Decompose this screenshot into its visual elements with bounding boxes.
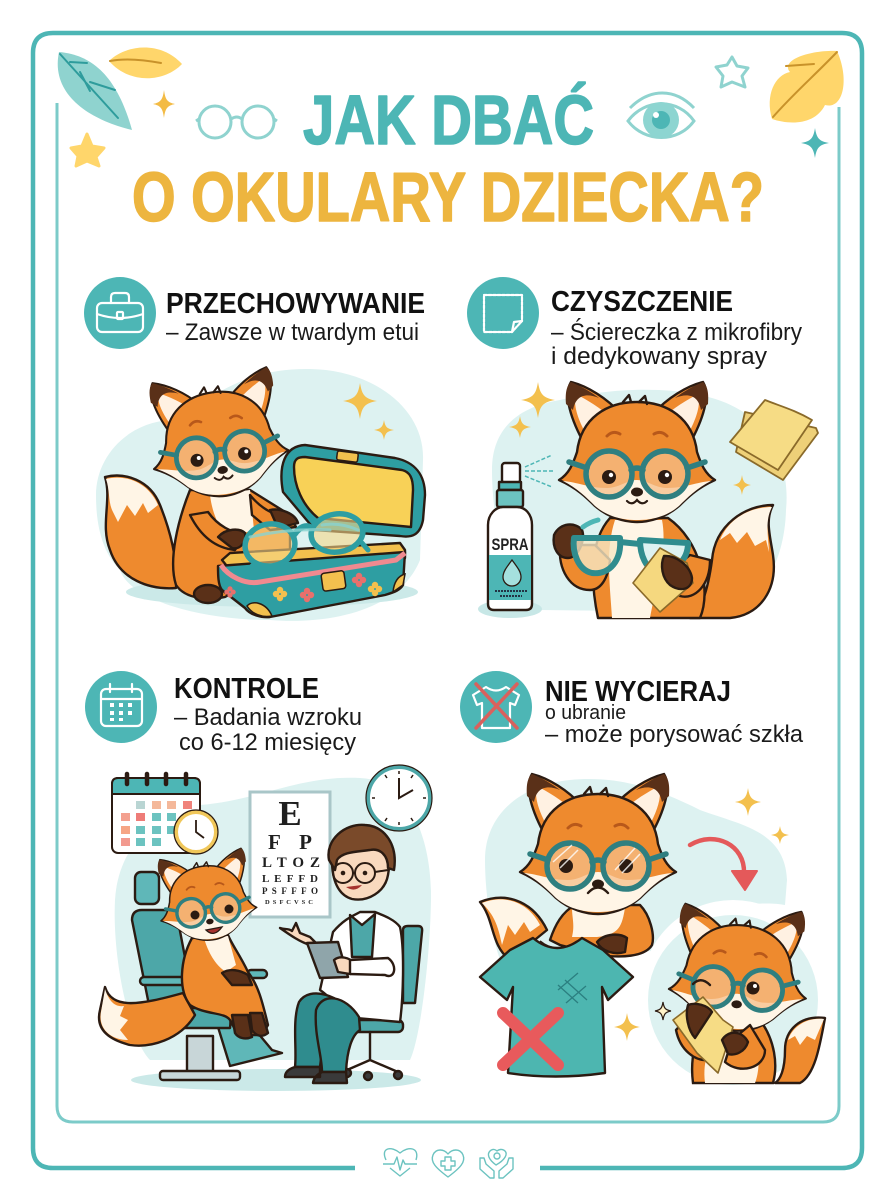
description [174,704,362,756]
icon: briefcase [84,277,156,349]
illustration: do not wipe with shirt [480,774,825,1085]
description: – może porysować szkła [545,721,803,748]
decoration: outline star [716,57,748,87]
illustration: fox with glasses case [96,366,425,621]
footer icon: hands with heart [480,1149,513,1178]
wall clock [366,765,432,831]
title line 1: JAK DBAĆ [303,81,594,159]
illustration: eye exam [99,765,432,1091]
decoration: yellow star [71,134,104,166]
eye chart: F P [268,830,312,854]
icon: cloth [467,277,539,349]
footer icon: heart with cross [432,1150,464,1177]
icon: glasses [196,106,277,138]
description: i dedykowany spray [551,343,768,370]
icon: eye [628,93,694,138]
description: – Ściereczka z mikrofibry [551,318,803,346]
eye chart: P S F F F O [262,886,318,896]
description: – Zawsze w twardym etui [166,319,419,346]
description: o ubranie [545,702,626,724]
panel: czyszczenie [467,277,818,618]
panel: nie wycieraj [460,671,825,1085]
decoration: small sparkle [153,90,175,118]
description: co 6-12 miesięcy [179,729,357,756]
calendar [112,774,218,854]
icon: calendar [85,671,157,743]
heading: NIE WYCIERAJ [545,676,731,708]
exam chair [132,872,282,1080]
eye chart: L E F F D [262,873,318,885]
sad fox [480,774,676,960]
heading: CZYSZCZENIE [551,286,733,318]
red arrow [690,839,757,890]
t-shirt [480,935,633,1076]
illustration: fox cleaning glasses: SPRA [492,535,528,554]
eye chart [250,792,330,917]
decoration: big yellow leaf [770,51,844,122]
doctor [280,825,422,1083]
footer icon: heart with pulse [383,1149,417,1176]
panel: kontrole [85,671,432,1091]
fox wiping glasses [666,903,825,1083]
panel: przechowywanie [84,277,425,621]
eye chart: L T O Z [262,855,320,871]
eye chart: D S F C V S C [265,899,313,906]
description [545,702,803,748]
eye chart: E [278,794,302,833]
heading: PRZECHOWYWANIE [166,288,425,320]
description [551,318,803,370]
illustration: fox cleaning glasses [478,382,818,618]
decoration: yellow leaf [109,47,182,78]
icon: crossed t-shirt [460,671,532,743]
decoration: teal sparkle [801,128,829,158]
description: – Badania wzroku [174,704,362,731]
heading: KONTROLE [174,673,319,705]
fox patient [99,847,268,1046]
decoration: teal leaf [58,52,132,130]
